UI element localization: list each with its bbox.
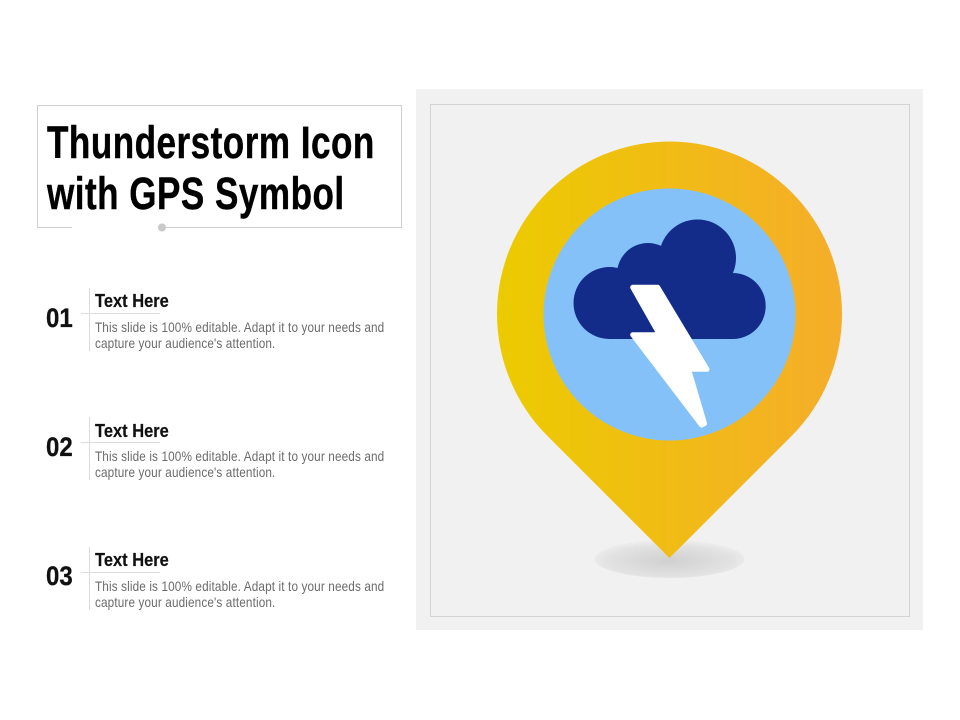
number 03: 03 (46, 561, 73, 591)
title: Thunderstorm Icon (47, 117, 375, 168)
pin body (497, 142, 842, 558)
heading 01: Text Here (95, 290, 169, 311)
divider lines 03 (81, 547, 160, 610)
text 02: capture your audience's attention. (95, 464, 275, 480)
list item 03 (46, 547, 384, 610)
text 03 (95, 578, 384, 610)
title box outline (37, 105, 402, 232)
title: with GPS Symbol (47, 168, 345, 219)
lightning bolt (633, 287, 707, 425)
cloud (574, 220, 766, 339)
number 01: 01 (46, 303, 73, 333)
text 02 (95, 448, 384, 480)
list item 02 (46, 417, 384, 480)
text 01: capture your audience's attention. (95, 335, 275, 351)
text 01 (95, 319, 384, 351)
icon: GPS pin with thunderstorm (497, 142, 842, 578)
panel: inner outlined frame (430, 104, 910, 617)
number 02: 02 (46, 432, 73, 462)
panel: right grey background (416, 89, 923, 630)
title (46, 117, 375, 219)
heading 02: Text Here (95, 420, 169, 441)
text 03: capture your audience's attention. (95, 594, 275, 610)
text 03: This slide is 100% editable. Adapt it to your needs and (95, 578, 384, 594)
divider lines 02 (81, 417, 160, 480)
list item 01 (46, 288, 384, 351)
text 02: This slide is 100% editable. Adapt it to your needs and (95, 448, 384, 464)
heading 03: Text Here (95, 549, 169, 570)
divider lines 01 (81, 288, 160, 351)
pin shadow (594, 540, 744, 578)
text 01: This slide is 100% editable. Adapt it to your needs and (95, 319, 384, 335)
inner blue circle (544, 188, 796, 440)
